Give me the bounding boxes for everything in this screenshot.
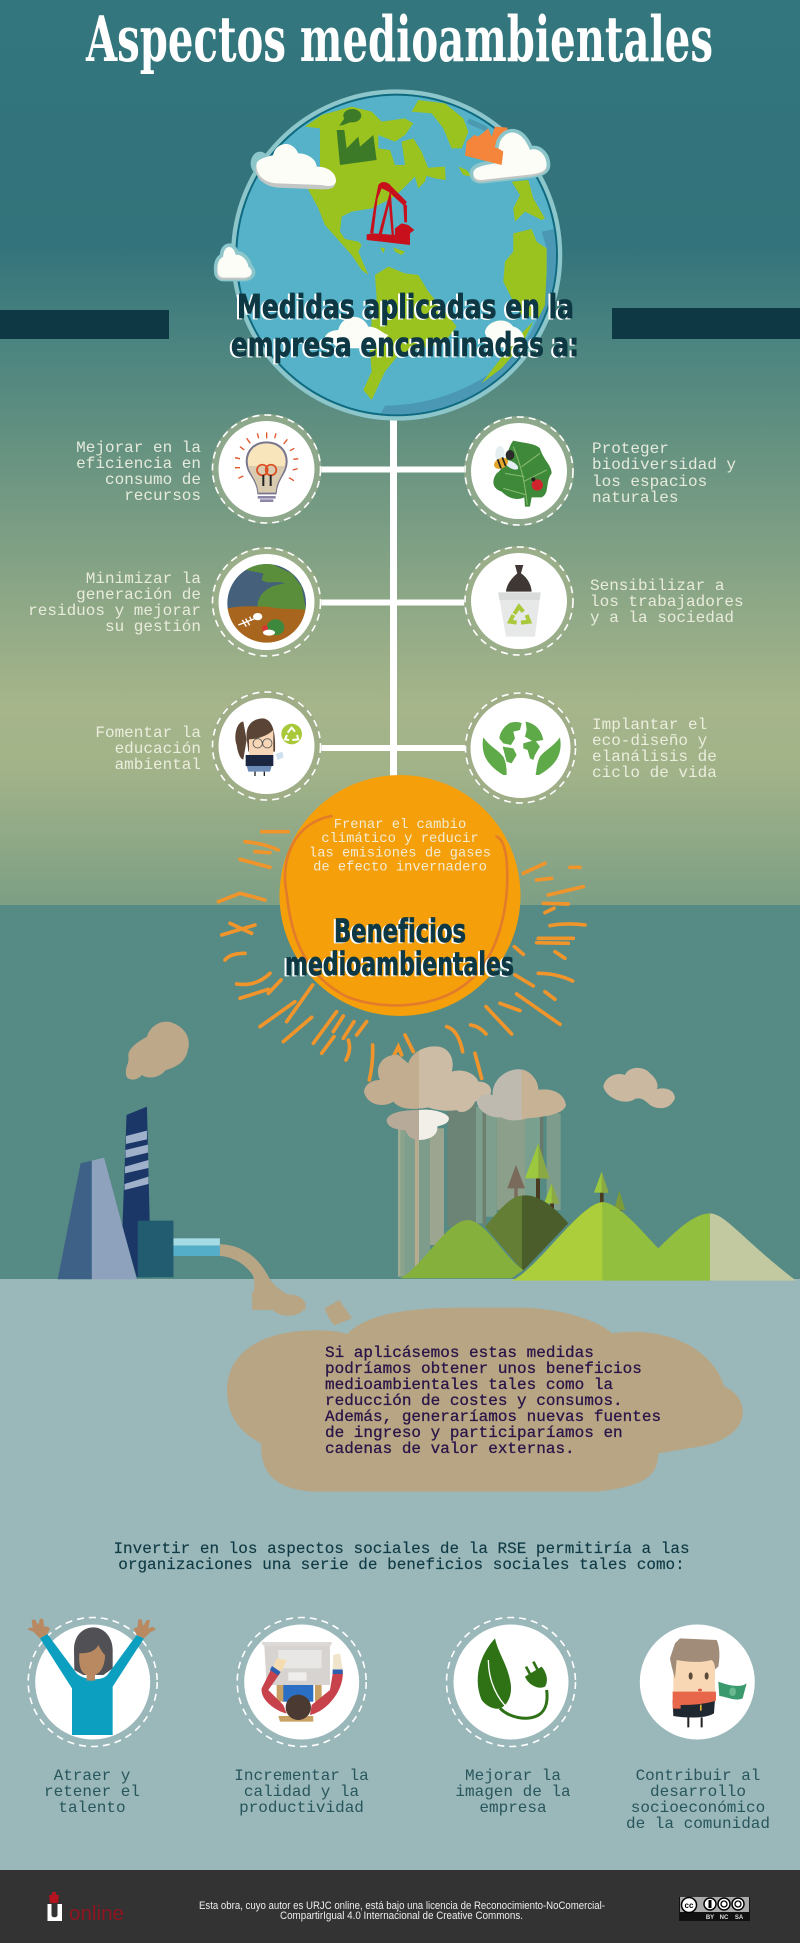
text: education: Fomentar la <box>95 724 201 742</box>
bee <box>492 446 520 472</box>
panel: measure circles <box>212 414 576 804</box>
trees <box>507 1143 625 1224</box>
forest illustration <box>364 1046 796 1281</box>
icon: woman with raised arms <box>27 1618 156 1735</box>
storm clouds <box>364 1046 566 1140</box>
text: biodiversity: biodiversidad y <box>592 456 736 474</box>
heading: beneficios: Beneficios <box>334 912 466 950</box>
text: bubble message: Si aplicásemos estas medidas <box>325 1344 594 1362</box>
icon: leaf with plug <box>478 1638 547 1718</box>
text: talent: talento <box>58 1799 126 1817</box>
ocean shade <box>380 228 562 418</box>
text: quality: Incrementar la <box>234 1767 369 1785</box>
bubble shape <box>227 1308 743 1492</box>
rain columns <box>398 1103 561 1277</box>
panel: measure icons top rows <box>225 432 552 643</box>
icon: polluted earth <box>225 563 308 643</box>
right dark band <box>612 308 800 339</box>
text: sun message: las emisiones de gases <box>309 846 491 862</box>
text: quality: productividad <box>239 1799 364 1817</box>
text: image: Mejorar la <box>465 1767 561 1785</box>
blob: small <box>324 1300 352 1325</box>
cc badge: SA <box>735 1915 744 1921</box>
orange factory front <box>466 142 503 165</box>
cloud: upper right <box>466 133 547 182</box>
circle: biodiversity <box>464 416 574 526</box>
panel: measure icons bottom row <box>235 718 561 776</box>
smoke cloud left <box>126 1022 189 1080</box>
text: image: imagen de la <box>455 1783 571 1801</box>
text: biodiversity: Proteger <box>592 440 669 458</box>
text: ecodesign: ciclo de vida <box>592 764 717 782</box>
panel: social icons right <box>478 1638 747 1727</box>
sun rays <box>218 816 585 1080</box>
logo: online <box>69 1903 124 1925</box>
background teal field <box>0 905 800 1279</box>
icon: girl with recycle sign <box>235 718 302 776</box>
text: bubble message: cadenas de valor externas. <box>325 1440 575 1458</box>
cc badge: cc <box>685 1901 694 1910</box>
smoke cloud right <box>603 1068 675 1108</box>
text: image: empresa <box>479 1799 547 1817</box>
circle: waste <box>212 547 322 657</box>
circle: ecodesign <box>465 692 576 804</box>
text: social intro: organizaciones una serie de beneficios sociales tales como: <box>118 1556 685 1574</box>
icon: green factory <box>337 109 377 165</box>
icon: trash bin <box>498 565 541 637</box>
ladybug <box>531 477 543 491</box>
text: bubble message: Además, generaríamos nuevas fuentes <box>325 1408 661 1426</box>
heading: medidas: empresa encaminadas a: <box>231 325 579 364</box>
circle: quality <box>237 1618 366 1746</box>
text: sun message: de efecto invernadero <box>313 860 487 876</box>
circle: image <box>446 1618 576 1746</box>
text: sun message: Frenar el cambio <box>334 817 466 833</box>
globe illustration <box>217 89 562 421</box>
circle: education <box>212 691 322 801</box>
text: community: socioeconómico <box>631 1799 765 1817</box>
cloud: bottom <box>325 317 388 348</box>
text: bubble message: medioambientales tales como la <box>325 1376 613 1394</box>
cloud: left small <box>217 247 252 280</box>
text: waste: residuos y mejorar <box>28 602 201 620</box>
left dark band <box>0 310 169 339</box>
circle: community <box>640 1624 755 1740</box>
heading: medidas: Medidas aplicadas en la <box>237 287 574 326</box>
text: sun message: climático y reducir <box>321 831 479 847</box>
text: waste: generación de <box>76 586 201 604</box>
text: bubble message: reducción de costes y consumos. <box>325 1392 623 1410</box>
text: biodiversity: los espacios <box>592 473 707 491</box>
text: efficiency: recursos <box>124 487 201 505</box>
icon: leaf with insects <box>492 441 552 507</box>
polluted bubble <box>227 1286 743 1492</box>
icon: red oil pump <box>367 182 414 245</box>
text: bubble message: podríamos obtener unos beneficios <box>325 1360 642 1378</box>
circle: talent <box>28 1618 157 1746</box>
blob: stream end <box>252 1286 306 1316</box>
drain pipe <box>173 1238 220 1256</box>
factory block <box>138 1221 173 1277</box>
panel: social texts <box>44 1767 770 1833</box>
text: awareness: Sensibilizar a <box>590 577 725 595</box>
heading: beneficios: medioambientales <box>285 945 514 983</box>
factory illustration <box>58 1022 306 1310</box>
chimney <box>122 1107 151 1277</box>
connector lines <box>320 415 467 780</box>
circle: efficiency <box>212 414 322 524</box>
cc badge: BY <box>706 1915 714 1921</box>
text: community: de la comunidad <box>626 1815 770 1833</box>
text: talent: retener el <box>44 1783 140 1801</box>
logo crown <box>49 1892 59 1903</box>
cc badge <box>679 1897 750 1921</box>
text: ecodesign: eco-diseño y <box>592 732 708 750</box>
mountains <box>400 1195 796 1281</box>
panel: measure texts <box>28 439 744 782</box>
text: efficiency: Mejorar en la <box>76 439 201 457</box>
text: ecodesign: Implantar el <box>592 716 707 734</box>
text: education: ambiental <box>115 756 201 774</box>
text: education: educación <box>115 740 201 758</box>
icon: orange factory <box>465 122 508 165</box>
cloud: bottom right <box>485 321 524 348</box>
license text: CompartirIgual 4.0 Internacional de Creative Commons. <box>280 1910 523 1922</box>
polluted stream <box>220 1244 306 1310</box>
sun sketch line <box>285 816 507 1005</box>
panel: social icons left <box>27 1618 343 1735</box>
text: awareness: los trabajadores <box>590 593 744 611</box>
text: community: Contribuir al <box>636 1767 760 1785</box>
text: talent: Atraer y <box>54 1767 131 1785</box>
text: waste: su gestión <box>105 618 201 636</box>
text: ecodesign: elanálisis de <box>592 748 717 766</box>
cc badge: NC <box>720 1915 729 1921</box>
text: waste: Minimizar la <box>86 570 201 588</box>
icon: hands holding globe <box>483 722 561 775</box>
text: bubble message: de ingreso y participaríamos en <box>325 1424 623 1442</box>
heading: medidas <box>231 287 579 364</box>
panel: social circles <box>28 1618 755 1746</box>
continents <box>305 100 547 400</box>
text: quality: calidad y la <box>244 1783 360 1801</box>
cloud: upper left <box>251 144 336 189</box>
sun <box>218 775 585 1080</box>
license text: Esta obra, cuyo autor es URJC online, está bajo una licencia de Reconocimiento-NoComercial- <box>199 1900 605 1912</box>
cooling tower <box>58 1158 137 1279</box>
text: biodiversity: naturales <box>592 489 678 507</box>
text: awareness: y a la sociedad <box>590 609 734 627</box>
background ground <box>0 1279 800 1870</box>
text: social intro: Invertir en los aspectos sociales de la RSE permitiría a las <box>113 1540 690 1558</box>
text: community: desarrollo <box>650 1783 746 1801</box>
logo <box>48 1892 124 1925</box>
circle: awareness <box>464 546 574 656</box>
heading: beneficios <box>285 912 514 983</box>
text: efficiency: eficiencia en <box>76 455 201 473</box>
footer <box>0 1870 800 1943</box>
icon: light bulb <box>235 432 298 502</box>
icon: man with money <box>670 1638 747 1727</box>
text: efficiency: consumo de <box>105 471 201 489</box>
icon: person with laptop <box>262 1642 343 1722</box>
background sky <box>0 0 800 905</box>
